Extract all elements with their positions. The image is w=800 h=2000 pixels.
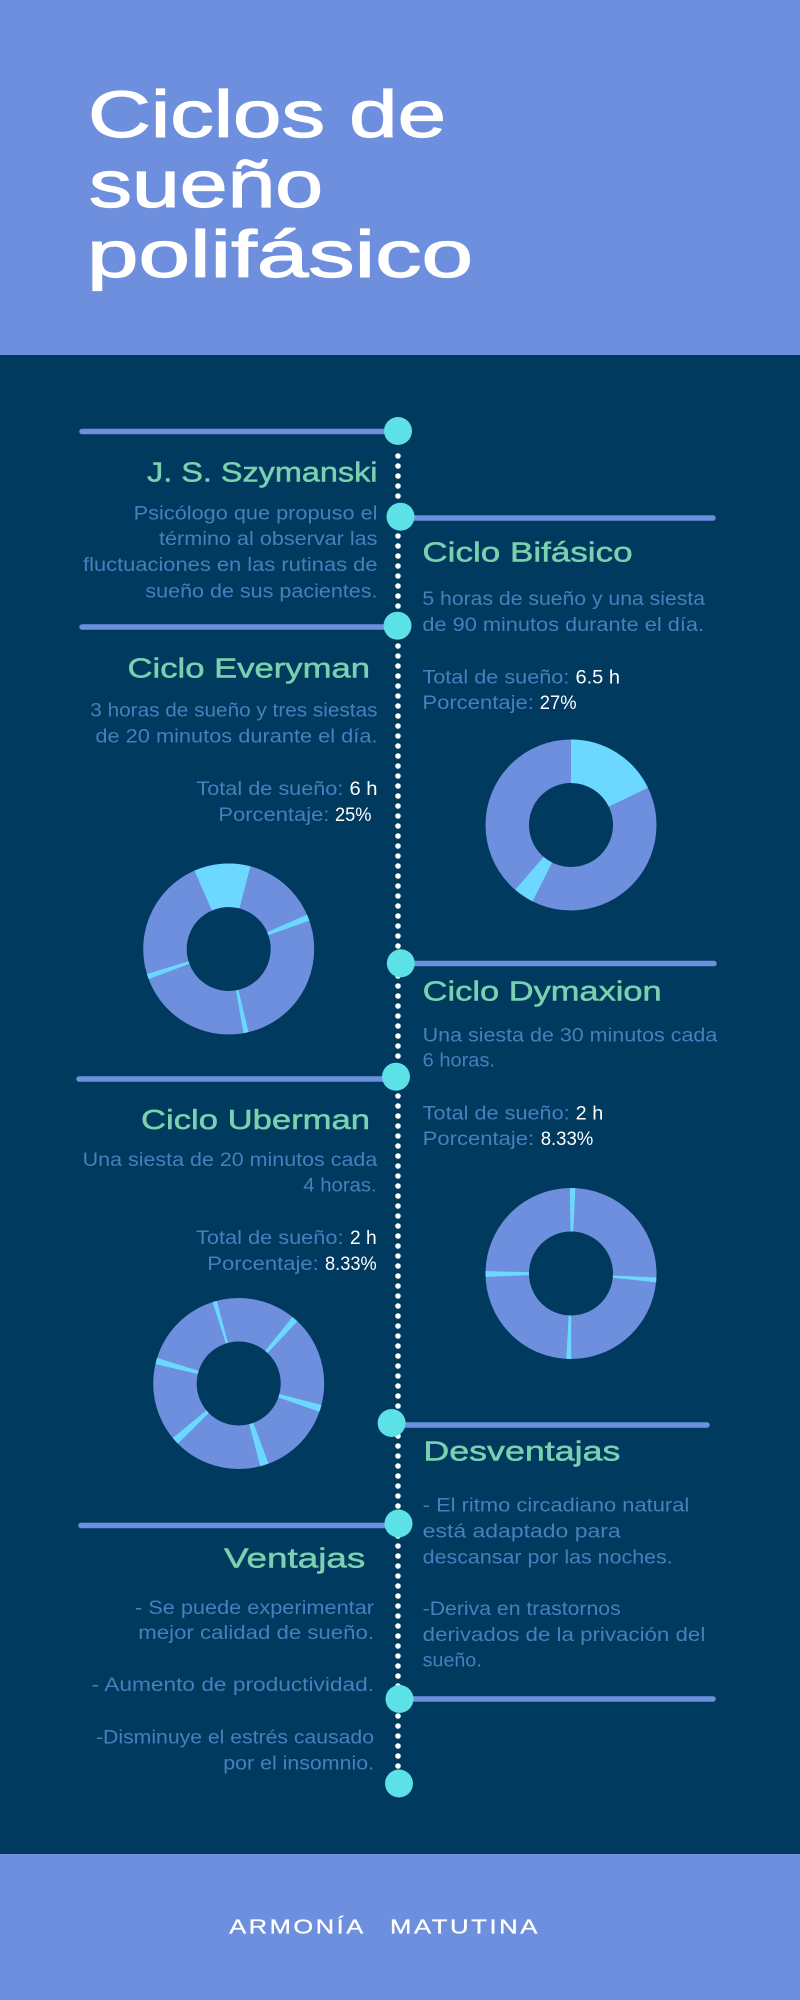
stats: Dymaxion: Porcentaje:: [423, 1129, 534, 1150]
heading: J. S. Szymanski: J. S. Szymanski: [147, 457, 378, 488]
text block: Desventajas list: - El ritmo circadiano natural: [423, 1495, 689, 1516]
text block: Desventajas list: sueño.: [423, 1651, 482, 1672]
stats: Bifásico: Porcentaje:: [422, 693, 534, 714]
stats: Bifásico: [422, 667, 620, 714]
text block: Szymanski description: [83, 503, 378, 602]
heading: Ventajas: Ventajas: [224, 1542, 365, 1573]
text block: Uberman description: 4 horas.: [303, 1176, 377, 1197]
stats: Uberman: Total de sueño:: [196, 1228, 344, 1249]
text block: Uberman description: Una siesta de 20 minutos cada: [83, 1150, 378, 1171]
panel: Desventajas: [423, 1436, 705, 1672]
text block: Everyman description: [90, 701, 378, 748]
text block: Dymaxion description: 6 horas.: [423, 1051, 495, 1072]
header band with title: [0, 0, 800, 355]
panel: Ciclo Bifásico: [422, 537, 705, 889]
text block: Bifásico description: de 90 minutos durante el día.: [422, 615, 704, 636]
donut chart: Uberman: [175, 1320, 302, 1447]
stats: Everyman: Total de sueño:: [196, 779, 343, 800]
title: sueño: [89, 147, 323, 221]
heading: Ciclo Bifásico: Ciclo Bifásico: [422, 537, 633, 568]
stats: Everyman: Porcentaje:: [218, 805, 329, 826]
stats: Dymaxion: [423, 1103, 603, 1150]
text block: Ventajas list: - Aumento de productividad.: [92, 1675, 374, 1696]
text block: Szymanski description: término al observar las: [159, 529, 378, 550]
text block: Szymanski description: sueño de sus pacientes.: [145, 581, 378, 602]
text block: Everyman description: de 20 minutos durante el día.: [95, 727, 378, 748]
text block: Bifásico description: [422, 589, 705, 636]
title: [87, 77, 473, 291]
title: Ciclos de: [88, 77, 446, 151]
panel: Ventajas: [92, 1542, 375, 1774]
stats: Dymaxion: 8.33%: [541, 1129, 593, 1150]
title: polifásico: [87, 217, 473, 291]
heading: Ciclo Everyman: Ciclo Everyman: [128, 653, 370, 684]
text block: Szymanski description: fluctuaciones en las rutinas de: [83, 555, 378, 576]
text block: Ventajas list: [92, 1598, 375, 1774]
stats: Everyman: 6 h: [350, 779, 378, 800]
stats: Bifásico: 27%: [540, 693, 577, 714]
timeline: dotted line, bars and nodes: [79, 417, 714, 1798]
donut chart: Everyman: [145, 865, 313, 1033]
donut chart: Bifásico: [507, 761, 635, 889]
stats: Dymaxion: 2 h: [576, 1103, 603, 1124]
footer brand: Armonía Matutina: [229, 1915, 540, 1938]
text block: Desventajas list: -Deriva en trastornos: [423, 1599, 621, 1620]
text block: Bifásico description: 5 horas de sueño y una siesta: [422, 589, 705, 610]
stats: Uberman: Porcentaje:: [207, 1254, 319, 1275]
heading: Desventajas: Desventajas: [423, 1436, 620, 1467]
heading: Ciclo Dymaxion: Ciclo Dymaxion: [423, 976, 662, 1007]
text block: Dymaxion description: Una siesta de 30 minutos cada: [423, 1026, 718, 1047]
stats: Everyman: 25%: [335, 805, 371, 826]
heading: Ciclo Uberman: Ciclo Uberman: [141, 1104, 370, 1135]
footer band with brand name: [0, 1854, 800, 2000]
panel: Ciclo Everyman: [90, 653, 378, 1033]
footer brand: Armonía Matutina: ARMONÍA: [229, 1915, 366, 1938]
panel: Ciclo Uberman: [83, 1104, 378, 1447]
stats: Everyman: [196, 779, 378, 826]
stats: Bifásico: 6.5 h: [576, 667, 620, 688]
text block: Uberman description: [83, 1150, 378, 1197]
stats: Uberman: 2 h: [350, 1228, 377, 1249]
footer brand: Armonía Matutina: MATUTINA: [390, 1916, 540, 1938]
donut chart: Dymaxion: [506, 1209, 636, 1338]
stats: Bifásico: Total de sueño:: [422, 667, 569, 688]
text block: Desventajas list: descansar por las noches.: [423, 1547, 673, 1568]
text block: Everyman description: 3 horas de sueño y tres siestas: [90, 701, 378, 722]
text block: Ventajas list: -Disminuye el estrés causado: [96, 1727, 374, 1748]
text block: Dymaxion description: [423, 1026, 718, 1072]
text block: Desventajas list: está adaptado para: [423, 1522, 621, 1543]
stats: Uberman: 8.33%: [325, 1254, 377, 1275]
text block: Desventajas list: [423, 1495, 705, 1672]
text block: Desventajas list: derivados de la privación del: [423, 1625, 705, 1646]
text block: Ventajas list: por el insomnio.: [223, 1753, 374, 1774]
text block: Ventajas list: - Se puede experimentar: [135, 1598, 375, 1619]
stats: Uberman: [196, 1228, 377, 1275]
panel: Ciclo Dymaxion: [423, 976, 718, 1338]
panel: J. S. Szymanski: [83, 457, 378, 602]
stats: Dymaxion: Total de sueño:: [423, 1103, 570, 1124]
text block: Ventajas list: mejor calidad de sueño.: [138, 1623, 374, 1644]
text block: Szymanski description: Psicólogo que propuso el: [134, 503, 378, 524]
